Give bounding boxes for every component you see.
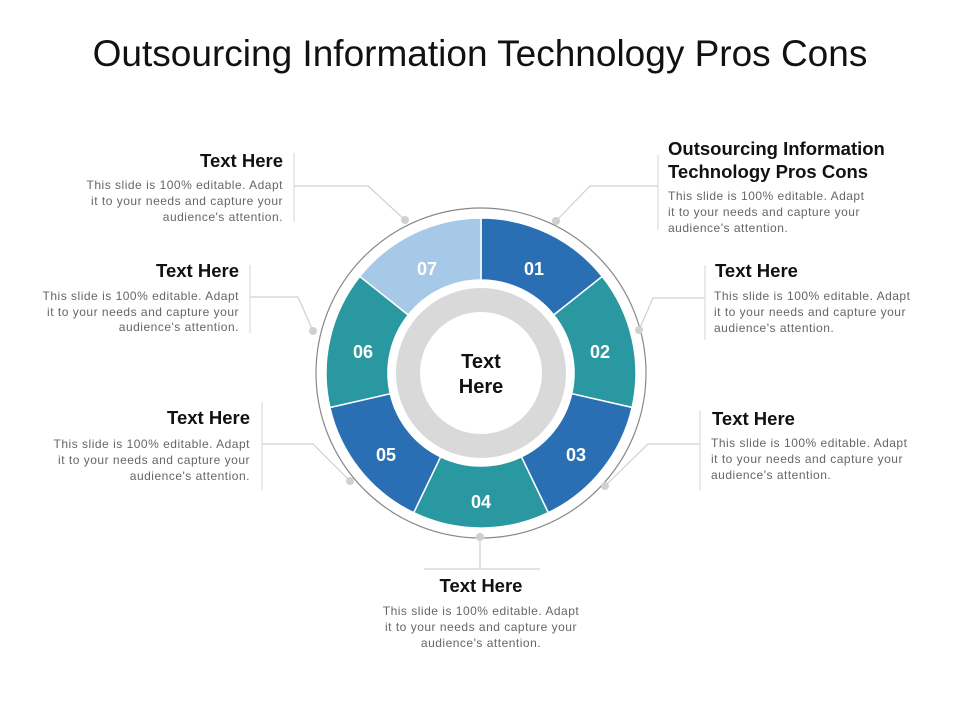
center text: Text bbox=[461, 351, 501, 373]
segment 06 bbox=[326, 276, 408, 408]
text block: top right bbox=[668, 138, 885, 235]
text block: left bottom: Text Here bbox=[167, 407, 250, 428]
text block: left middle: This slide is 100% editable. Adapt bbox=[43, 289, 239, 303]
text block: right middle: it to your needs and capture your bbox=[714, 305, 906, 319]
text block: left middle: it to your needs and capture your bbox=[47, 305, 239, 319]
text block: right bottom bbox=[711, 408, 908, 482]
text block: bottom: audience's attention. bbox=[421, 636, 541, 650]
segment numbers: 06 bbox=[353, 342, 373, 362]
text block: right bottom: This slide is 100% editable. Adapt bbox=[711, 436, 908, 450]
text block: left middle: audience's attention. bbox=[119, 320, 239, 334]
text block: right bottom: Text Here bbox=[712, 408, 795, 429]
segment numbers: 02 bbox=[590, 342, 610, 362]
text block: bottom: it to your needs and capture your bbox=[385, 620, 577, 634]
title: Outsourcing Information Technology Pros Cons bbox=[93, 33, 867, 74]
segment 01 bbox=[481, 218, 602, 315]
center gray ring bbox=[408, 300, 554, 446]
text block: bottom: Text Here bbox=[440, 575, 522, 596]
text block: top left bbox=[87, 150, 283, 224]
text block: top left: it to your needs and capture your bbox=[91, 194, 283, 208]
text block: right bottom: it to your needs and capture your bbox=[711, 452, 903, 466]
segment numbers bbox=[353, 259, 610, 512]
segment numbers: 01 bbox=[524, 259, 544, 279]
segment 03 bbox=[521, 394, 632, 513]
segment numbers: 04 bbox=[471, 492, 491, 512]
text block: left bottom: This slide is 100% editable. Adapt bbox=[54, 437, 250, 451]
segment 05 bbox=[330, 394, 441, 513]
text block: left bottom bbox=[54, 407, 250, 483]
text block: right middle: audience's attention. bbox=[714, 321, 834, 335]
segment 02 bbox=[554, 276, 636, 408]
center text bbox=[459, 351, 503, 398]
text block: right middle: Text Here bbox=[715, 260, 798, 281]
segment numbers: 05 bbox=[376, 445, 396, 465]
text block: top left: This slide is 100% editable. Adapt bbox=[87, 178, 283, 192]
center text: Here bbox=[459, 376, 503, 398]
text block: right middle: This slide is 100% editable. Adapt bbox=[714, 289, 911, 303]
text block: right middle bbox=[714, 260, 911, 335]
text block: top right: Outsourcing Information bbox=[668, 138, 885, 159]
connectors bbox=[250, 153, 705, 569]
text block: left middle: Text Here bbox=[156, 260, 239, 281]
text block: left bottom: audience's attention. bbox=[130, 469, 250, 483]
text block: bottom bbox=[383, 575, 579, 650]
donut chart segments bbox=[326, 218, 636, 528]
text block: left bottom: it to your needs and capture your bbox=[58, 453, 250, 467]
text block: right bottom: audience's attention. bbox=[711, 468, 831, 482]
segment 04 bbox=[414, 457, 548, 528]
text block: top right: This slide is 100% editable. Adapt bbox=[668, 189, 865, 203]
text block: top left: audience's attention. bbox=[163, 210, 283, 224]
text block: top left: Text Here bbox=[200, 150, 283, 171]
text block: bottom: This slide is 100% editable. Adapt bbox=[383, 604, 579, 618]
segment numbers: 07 bbox=[417, 259, 437, 279]
text block: left middle bbox=[43, 260, 239, 334]
text block: top right: Technology Pros Cons bbox=[668, 161, 868, 182]
segment 07 bbox=[360, 218, 481, 315]
text block: top right: audience's attention. bbox=[668, 221, 788, 235]
outer ring circle bbox=[316, 208, 646, 538]
text block: top right: it to your needs and capture your bbox=[668, 205, 860, 219]
segment numbers: 03 bbox=[566, 445, 586, 465]
